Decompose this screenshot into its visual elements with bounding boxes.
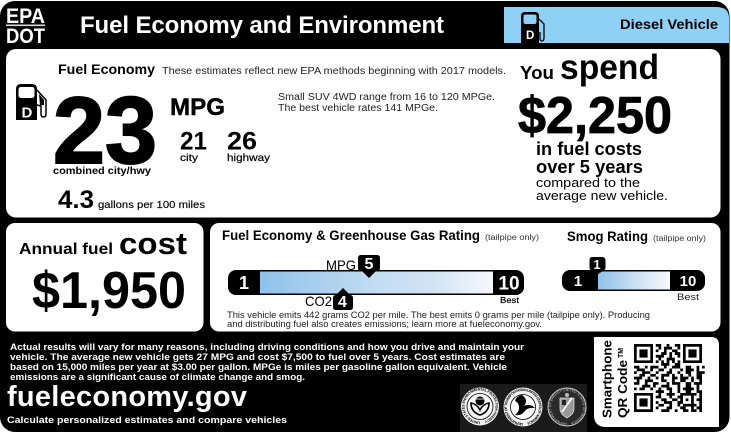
you spend heading: spend bbox=[560, 48, 659, 87]
smog marker: 1 bbox=[593, 257, 601, 272]
greenhouse rating bar: 1 bbox=[239, 273, 249, 293]
QR caption: Smartphone bbox=[600, 340, 614, 418]
greenhouse rating heading: (tailpipe only) bbox=[485, 233, 539, 242]
emissions note bbox=[227, 310, 650, 329]
vehicle class range: Small SUV 4WD range from 16 to 120 MPGe. bbox=[278, 92, 495, 103]
five year cost: $2,250 bbox=[518, 87, 672, 145]
smog rating heading: Smog Rating bbox=[567, 228, 648, 244]
panel: annual fuel cost: cost bbox=[119, 226, 187, 261]
agency seals bbox=[460, 384, 587, 432]
gallons per 100 miles: 4.3 bbox=[58, 186, 94, 214]
disclaimer text bbox=[10, 342, 524, 383]
cost description bbox=[536, 139, 668, 203]
smog best label: Best bbox=[677, 292, 699, 303]
icon: DOE seal: DEPARTMENT OF ENERGY UNITED STATES OF AMERICA bbox=[548, 388, 586, 426]
emissions note: and distributing fuel also creates emissions; learn more at fueleconomy.gov. bbox=[227, 319, 542, 329]
smog marker bbox=[590, 257, 606, 274]
icon: diesel pump bbox=[16, 84, 46, 122]
you spend heading: You bbox=[520, 63, 554, 83]
smog rating heading: (tailpipe only) bbox=[653, 234, 706, 243]
header: agency mark: DOT bbox=[6, 25, 45, 48]
panel: annual fuel cost bbox=[6, 223, 204, 332]
disclaimer text: emissions are a significant cause of climate change and smog. bbox=[10, 372, 305, 383]
panel: fuel economy and five year cost bbox=[6, 48, 720, 218]
QR caption: QR Code bbox=[615, 360, 630, 418]
smog rating bar: 1 bbox=[574, 273, 582, 290]
highway mpg: 26 bbox=[227, 128, 257, 156]
greenhouse rating bar bbox=[228, 270, 524, 295]
gallons per 100 miles: gallons per 100 miles bbox=[98, 199, 205, 211]
cost description: over 5 years bbox=[536, 157, 643, 177]
QR code bbox=[634, 344, 705, 412]
header: agency mark: EPA bbox=[6, 5, 45, 28]
icon: DOT seal: DEPARTMENT OF TRANSPORTATION UNITED STATES OF AMERICA bbox=[504, 388, 542, 426]
you spend heading bbox=[520, 48, 659, 87]
co2 marker bbox=[305, 288, 353, 311]
fuel type tab bbox=[504, 7, 729, 43]
disclaimer text: Actual results will vary for many reasons, including driving conditions and how you drive and maintain your bbox=[10, 342, 524, 353]
estimates note: These estimates reflect new EPA methods beginning with 2017 models. bbox=[162, 65, 506, 77]
QR caption bbox=[600, 340, 630, 418]
co2 marker: CO2 bbox=[305, 293, 332, 309]
QR caption: TM bbox=[618, 348, 625, 358]
icon: diesel pump: D bbox=[22, 104, 32, 122]
mpg marker: MPG bbox=[326, 257, 356, 273]
vehicle class range bbox=[278, 92, 495, 114]
disclaimer text: based on 15,000 miles per year at $3.00 per gallon. MPGe is miles per gasoline gallon equivalent. Vehicle bbox=[10, 362, 507, 373]
smog rating heading bbox=[567, 228, 706, 244]
annual cost value: $1,950 bbox=[32, 262, 186, 320]
panel: QR code bbox=[594, 337, 719, 427]
mpg unit: MPG bbox=[170, 94, 225, 121]
cost description: compared to the bbox=[536, 175, 640, 190]
cost description: average new vehicle. bbox=[536, 188, 668, 203]
city mpg: 21 bbox=[180, 128, 207, 156]
mpg marker bbox=[326, 255, 380, 278]
gallons per 100 miles bbox=[58, 186, 205, 214]
disclaimer text: vehicle. The average new vehicle gets 27 MPG and cost $7,500 to fuel over 5 years. Cost estimates are bbox=[10, 352, 505, 363]
smog rating bar: 10 bbox=[680, 273, 696, 290]
city label: city bbox=[180, 152, 199, 164]
cost description: in fuel costs bbox=[536, 139, 642, 159]
combined mpg value: 23 bbox=[53, 78, 157, 184]
icon: small diesel pump bbox=[521, 12, 544, 43]
highway label: highway bbox=[227, 152, 271, 164]
annual fuel cost heading: Annual fuel bbox=[19, 241, 113, 258]
best label: Best bbox=[500, 295, 520, 305]
header: agency mark bbox=[6, 5, 45, 48]
vehicle class range: The best vehicle rates 141 MPGe. bbox=[278, 103, 438, 114]
smog rating bar bbox=[562, 270, 705, 291]
panel: ratings bbox=[210, 223, 720, 332]
icon: EPA seal: UNITED STATES ENVIRONMENTAL PROTECTION AGENCY bbox=[462, 388, 498, 424]
website tagline: Calculate personalized estimates and compare vehicles bbox=[7, 415, 287, 426]
website: fueleconomy.gov bbox=[7, 381, 247, 413]
emissions note: This vehicle emits 442 grams CO2 per mile. The best emits 0 grams per mile (tailpipe only). Producing bbox=[227, 310, 650, 320]
title: Fuel Economy and Environment bbox=[80, 12, 444, 39]
fuel type name: Diesel Vehicle bbox=[620, 16, 718, 32]
greenhouse rating bar: 10 bbox=[498, 274, 520, 294]
mpg marker: 5 bbox=[365, 256, 374, 273]
icon: small diesel pump: D bbox=[526, 30, 534, 42]
fuel economy heading: Fuel Economy bbox=[58, 61, 155, 77]
co2 marker: 4 bbox=[338, 294, 347, 311]
combined label: combined city/hwy bbox=[53, 165, 151, 177]
greenhouse rating heading: Fuel Economy & Greenhouse Gas Rating bbox=[222, 227, 480, 243]
